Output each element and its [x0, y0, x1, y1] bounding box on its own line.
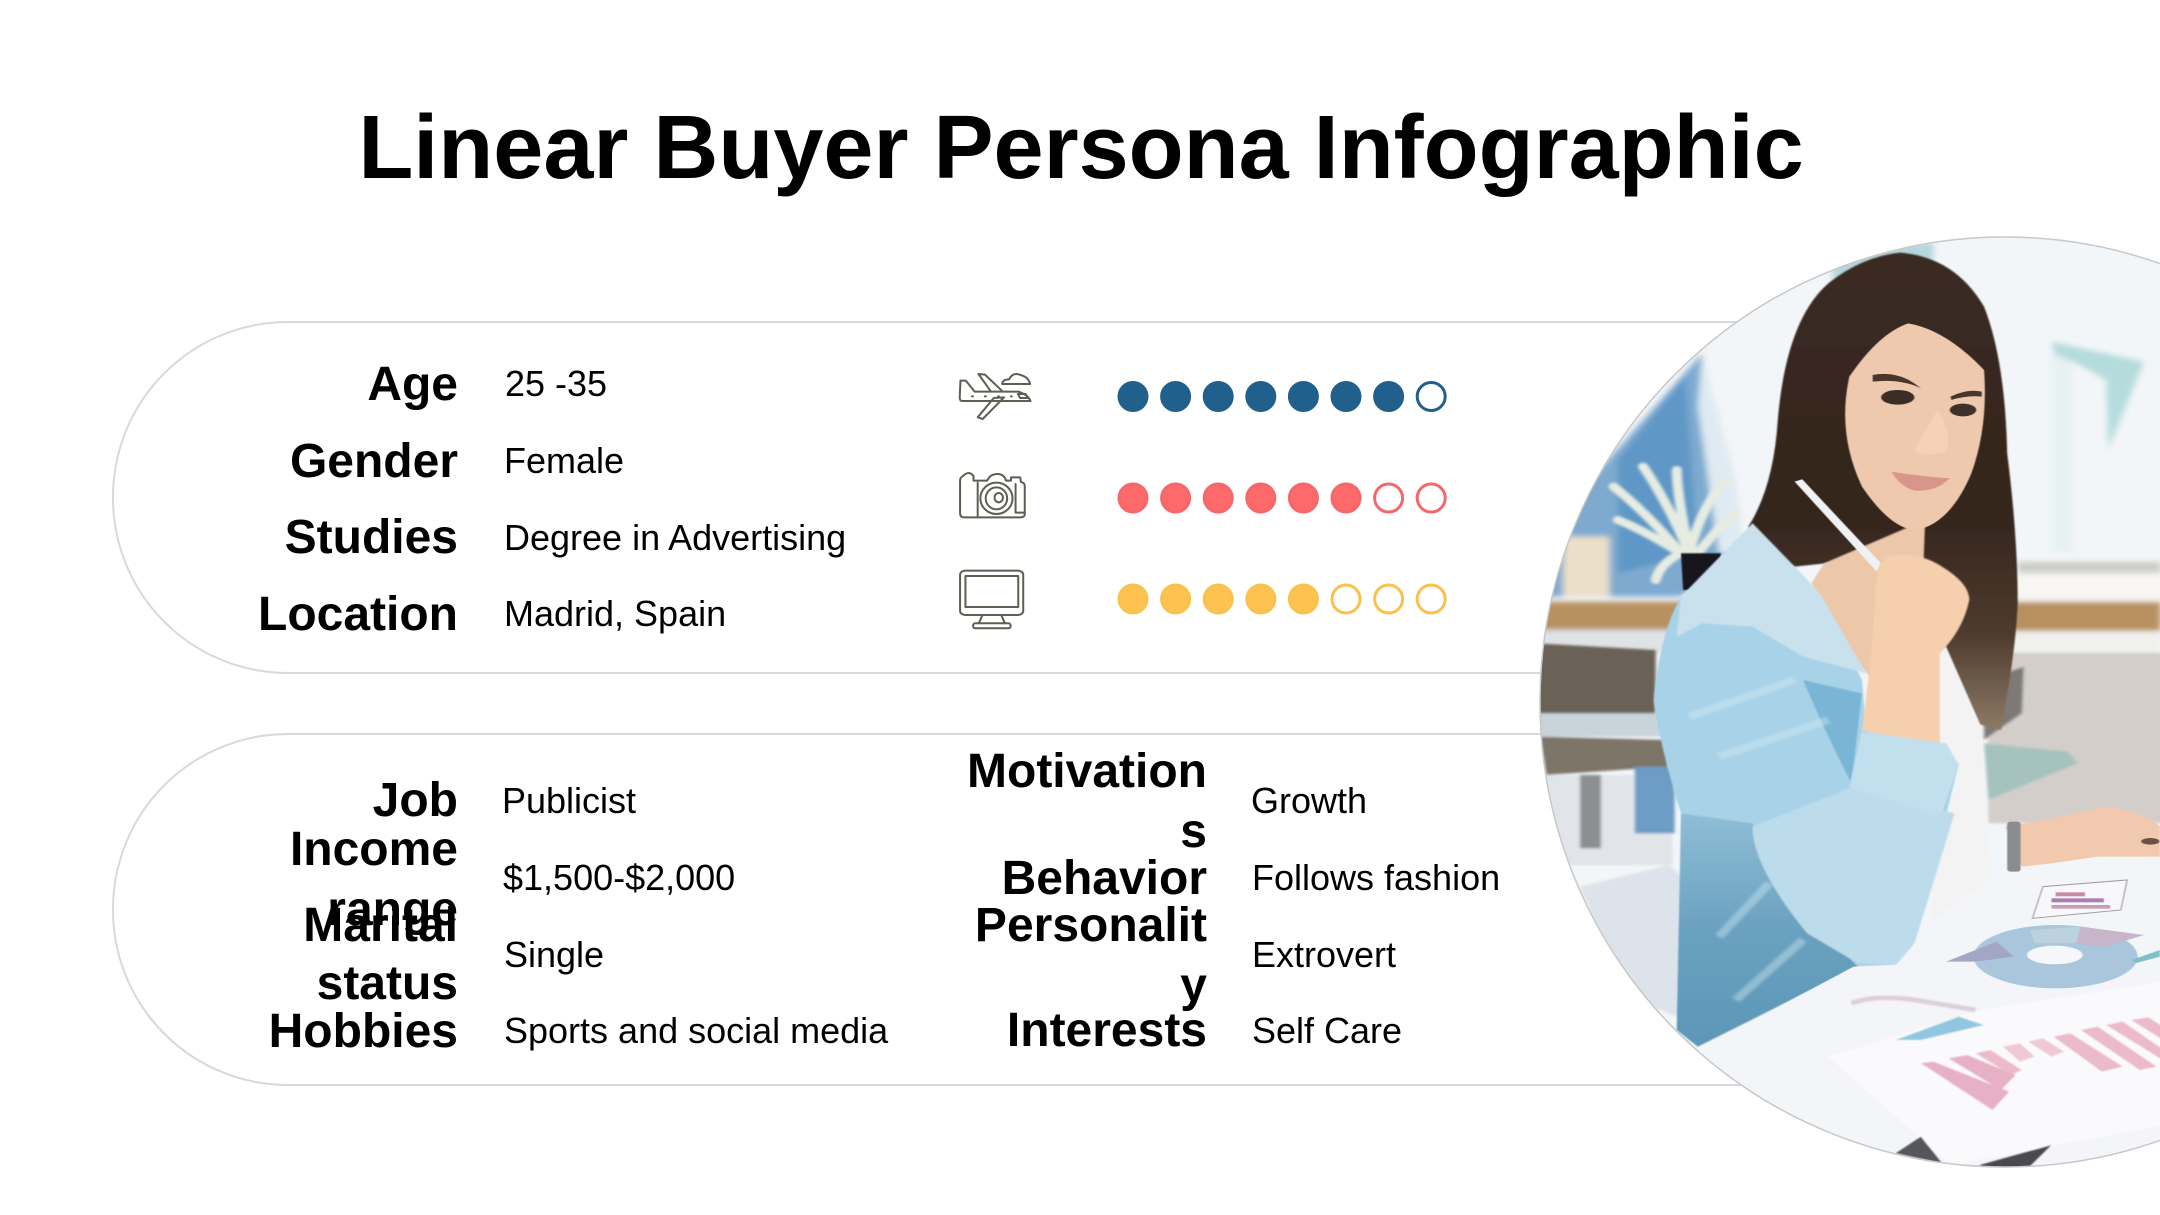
label: Age: Age: [367, 358, 458, 411]
label: Personality: [975, 899, 1207, 1012]
label: Marital status: status: [317, 957, 458, 1010]
plant: [1614, 467, 1736, 580]
panel: professional and lifestyle pill: [112, 733, 2116, 1086]
lower background: [1538, 643, 2160, 1020]
pen: [1795, 479, 1881, 572]
icon: camera: [960, 473, 1025, 517]
label: Motivations: s: [1180, 805, 1207, 858]
label: Personality: Personalit: [975, 899, 1207, 952]
rating: technology dots, 5 of 8: [1119, 585, 1445, 613]
label: Income range: [290, 823, 458, 936]
face: [1845, 323, 1985, 530]
value: Marital status: Single: [504, 934, 604, 975]
label: Gender: Gender: [290, 435, 458, 488]
icon: airplane and cloud: [960, 374, 1031, 419]
label: Personality: y: [1180, 959, 1207, 1012]
title: Linear Buyer Persona Infographic: [358, 98, 1804, 198]
value: Job: Publicist: [502, 780, 636, 821]
upper background: [1544, 243, 2160, 654]
value: Income range: $1,500-$2,000: [503, 857, 735, 898]
label: Hobbies: Hobbies: [269, 1005, 458, 1058]
label: Motivations: [967, 745, 1207, 858]
value: Motivations: Growth: [1251, 780, 1367, 821]
label: Location: Location: [258, 588, 458, 641]
label: Interests: Interests: [1007, 1004, 1207, 1057]
label: Studies: Studies: [285, 511, 458, 564]
hand holding pen: [1850, 556, 1970, 787]
plant pot: [1681, 553, 1721, 590]
value: Behavior: Follows fashion: [1252, 857, 1500, 898]
rating: photography dots, 6 of 8: [1119, 484, 1445, 512]
value: Gender: Female: [504, 440, 624, 481]
panel: demographics pill: [112, 321, 2116, 674]
value: Location: Madrid, Spain: [504, 593, 726, 634]
hair: [1748, 253, 2018, 730]
icon: desktop monitor: [960, 571, 1023, 628]
label: Marital status: [303, 899, 458, 1010]
neck: [1811, 520, 1925, 687]
label: Motivations: Motivation: [967, 745, 1207, 798]
printed bar chart on desk: [1850, 995, 2160, 1166]
cardigan highlights: [1689, 680, 1828, 1000]
rating: travel dots, 7 of 8: [1119, 382, 1445, 410]
photo: woman at desk with charts, circular crop: [1530, 230, 2160, 1187]
shirt: [1942, 646, 1981, 726]
label: Job: Job: [373, 774, 458, 827]
label: Behavior: Behavior: [1002, 852, 1207, 905]
value: Interests: Self Care: [1252, 1010, 1402, 1051]
value: Personality: Extrovert: [1252, 934, 1396, 975]
cardigan: [1654, 523, 1959, 1047]
value: Studies: Degree in Advertising: [504, 517, 846, 558]
label: Income range: Income: [290, 823, 458, 876]
value: Hobbies: Sports and social media: [504, 1010, 888, 1051]
value: Age: 25 -35: [505, 363, 607, 404]
label: Income range: range: [327, 883, 458, 936]
label: Marital status: Marital: [303, 899, 458, 952]
desk and papers: [1762, 806, 2160, 1016]
